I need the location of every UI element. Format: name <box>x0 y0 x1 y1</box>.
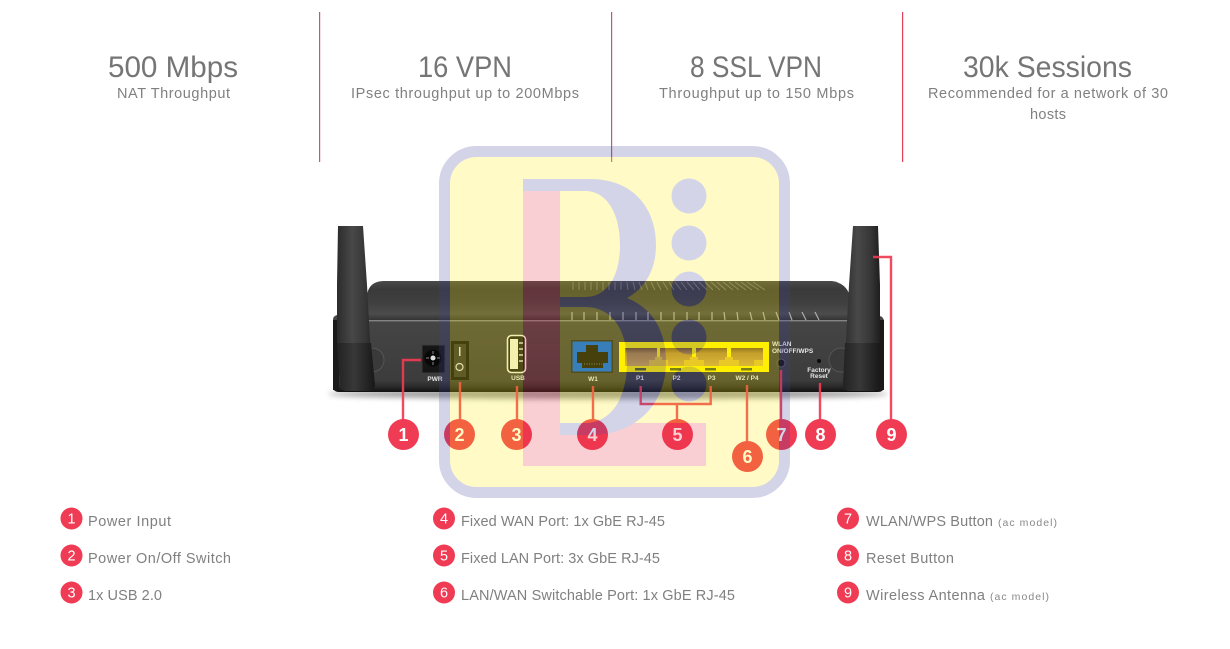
legend column 1: Power On/Off Switch <box>88 551 231 567</box>
numbered callouts on router: 6 <box>742 447 753 467</box>
legend column 2: Fixed LAN Port: 3x GbE RJ-45 <box>461 551 660 567</box>
right antenna <box>843 226 880 391</box>
antenna mounts <box>360 348 853 372</box>
numbered callouts on router: 1 <box>398 425 409 445</box>
legend column 2: LAN/WAN Switchable Port: 1x GbE RJ-45 <box>461 588 735 604</box>
WLAN / WPS button: ON/OFF/WPS <box>772 348 814 355</box>
LAN / WAN ports <box>619 342 769 382</box>
legend column 2: 5 <box>440 548 448 564</box>
legend column 3: Wireless Antenna <box>866 588 986 604</box>
WLAN / WPS button: WLAN <box>772 341 792 348</box>
numbered callouts on router: 5 <box>672 425 683 445</box>
watermark logo <box>444 152 784 492</box>
stat: NAT throughput <box>108 51 238 102</box>
stat: IPsec VPN: IPsec throughput up to 200Mbps <box>351 86 579 102</box>
router top housing <box>366 281 852 322</box>
WAN port: W1 <box>588 376 598 383</box>
legend column 3 <box>837 508 1057 604</box>
LAN / WAN ports: P2 <box>673 375 681 382</box>
USB port <box>508 336 526 382</box>
legend column 1: 1x USB 2.0 <box>88 588 162 604</box>
legend column 3: Reset Button <box>866 551 954 567</box>
legend <box>60 508 1057 604</box>
numbered callouts on router: 8 <box>815 425 826 445</box>
LAN / WAN ports: P1 <box>636 375 644 382</box>
WAN port <box>571 340 613 383</box>
factory reset: Factory <box>807 367 831 374</box>
LAN / WAN ports: W2 / P4 <box>735 375 759 382</box>
stat: IPsec VPN: 16 VPN <box>418 51 512 84</box>
numbered callouts on router: 2 <box>454 425 465 445</box>
legend column 2: 6 <box>440 586 448 602</box>
WLAN / WPS button <box>772 341 814 367</box>
callout connector lines <box>403 257 891 442</box>
legend column 2: 4 <box>440 512 448 528</box>
stat: NAT throughput: 500 Mbps <box>108 51 238 84</box>
stat: sessions: 30k Sessions <box>963 51 1132 84</box>
stat: sessions <box>928 51 1168 123</box>
left antenna <box>337 226 375 391</box>
legend column 3: 8 <box>844 548 852 564</box>
stat: NAT throughput: NAT Throughput <box>117 86 230 102</box>
legend column 1: 3 <box>67 586 76 602</box>
power switch <box>451 341 469 380</box>
legend column 1: Power Input <box>88 514 171 530</box>
legend column 3: (ac model) <box>990 591 1049 603</box>
stat: SSL VPN: 8 SSL VPN <box>690 51 822 84</box>
stat: SSL VPN: Throughput up to 150 Mbps <box>659 86 854 102</box>
factory reset <box>807 359 831 380</box>
numbered callouts on router: 3 <box>511 425 522 445</box>
legend column 3: 7 <box>844 512 852 528</box>
legend column 3: (ac model) <box>998 517 1057 529</box>
stat: sessions: Recommended for a network of 30 <box>928 86 1168 102</box>
numbered callouts on router: 9 <box>886 425 897 445</box>
legend column 2 <box>433 508 735 604</box>
router rear panel illustration <box>328 226 888 399</box>
legend column 1: 2 <box>67 548 76 564</box>
legend column 3: WLAN/WPS Button <box>866 514 993 530</box>
legend column 1: 1 <box>67 512 76 528</box>
numbered callouts on router: 4 <box>587 425 598 445</box>
panel: key specifications <box>108 12 1168 162</box>
legend column 3: 9 <box>844 586 852 602</box>
factory reset: Reset <box>810 373 829 380</box>
stat: SSL VPN <box>659 51 854 102</box>
USB port: USB <box>511 375 525 382</box>
legend column 2: Fixed WAN Port: 1x GbE RJ-45 <box>461 514 665 530</box>
numbered callouts on router <box>388 419 907 472</box>
power input jack <box>422 345 445 383</box>
router front face <box>333 315 884 392</box>
legend column 1 <box>60 508 231 604</box>
numbered callouts on router: 7 <box>776 425 787 445</box>
power input jack: PWR <box>427 376 443 383</box>
stat: sessions: hosts <box>1030 107 1066 123</box>
stat: IPsec VPN <box>351 51 579 102</box>
LAN / WAN ports: P3 <box>708 375 716 382</box>
